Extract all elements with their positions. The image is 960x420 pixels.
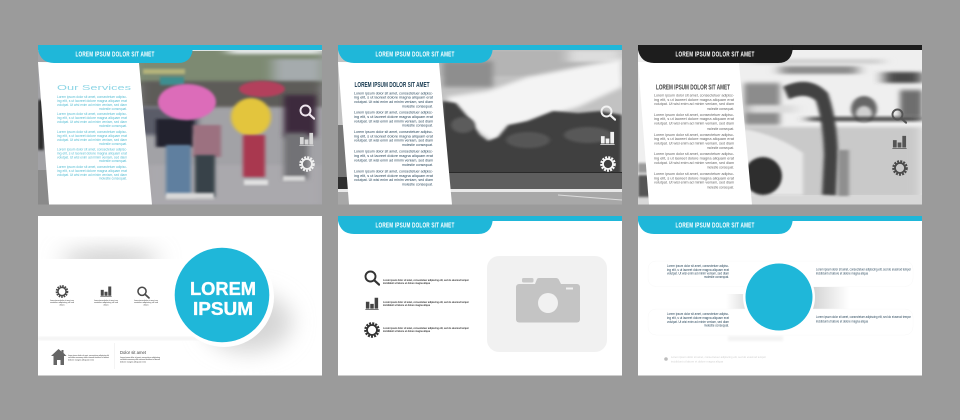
icon: gear	[300, 157, 314, 171]
body copy: ing elit, s ut laoreet dolore magna aliquam erat	[654, 117, 734, 121]
teal circle	[175, 248, 269, 342]
panel: central circle slide	[638, 216, 922, 376]
top strip	[338, 216, 622, 221]
text: magnifier row	[383, 278, 469, 285]
header tab	[638, 216, 793, 234]
text: lower left: Lorem ipsum dolor sit amet, consectetuer adipisc-	[667, 312, 730, 316]
body copy: ing elit, s ut laoreet dolore magna aliquam erat	[354, 134, 434, 138]
icon: gear	[57, 286, 67, 297]
body copy: Lorem ipsum dolor sit amet, consectetuer adipisc-	[654, 172, 735, 176]
slide background	[338, 216, 622, 376]
address text	[68, 354, 109, 361]
text: upper left	[667, 264, 730, 279]
address text: dolore magna aliquam erat	[68, 358, 94, 361]
caption: bars: sectetuer adipiscing elit sed	[94, 301, 118, 304]
body copy: volutpat. Ut wisi enim ad minim veniam, sed diam	[57, 120, 127, 124]
caption: magnifier	[134, 299, 158, 306]
icon: gear	[893, 161, 907, 175]
body copy: molestie consequat.	[99, 159, 127, 163]
caption: gear: sectetuer adipiscing elit sed	[50, 301, 74, 304]
caption: gear: Lorem ipsum dolor sit amet, con	[50, 299, 74, 302]
body copy	[654, 94, 735, 189]
tab title: LOREM IPSUM DOLOR SIT AMET	[676, 222, 755, 229]
body copy: ing elit, s ut laoreet dolore magna aliquam erat	[57, 169, 127, 173]
text: upper right: Lorem ipsum dolor sit amet, consectetuer adipiscing elit, sed do eiusmod tempor	[816, 267, 912, 271]
body copy: Lorem ipsum dolor sit amet, consectetuer adipisc-	[654, 152, 735, 156]
body copy: ing elit, s ut laoreet dolore magna aliquam erat	[354, 154, 434, 158]
circle title	[190, 279, 256, 319]
text: lower right: Lorem ipsum dolor sit amet, consectetuer adipiscing elit, sed do eiusmod tempor	[816, 315, 912, 319]
icon: bars	[299, 133, 314, 146]
text: magnifier row: Lorem ipsum dolor sit amet, consectetuer adipiscing elit, sed do eiusmod tempor	[383, 278, 469, 282]
footer bullet	[664, 357, 668, 361]
body copy: volutpat. Ut wisi enim ad minim veniam, sed diam	[57, 173, 127, 177]
text: upper right: incididunt ut labore et dolore magna aliqua	[816, 271, 869, 275]
text: upper right	[816, 267, 912, 275]
text: bars row: Lorem ipsum dolor sit amet, consectetuer adipiscing elit, sed do eiusmod tempor	[383, 300, 469, 304]
body copy: molestie consequat.	[707, 146, 734, 150]
tab title: LOREM IPSUM DOLOR SIT AMET	[376, 222, 455, 229]
contact text: Lorem ipsum dolor sit amet, consectetuer adipiscing	[120, 356, 160, 359]
contact text: Dolor sit amet	[120, 350, 147, 355]
soft shadows	[38, 251, 292, 352]
body copy: Lorem ipsum dolor sit amet, consectetuer adipisc-	[354, 91, 434, 95]
icon: magnifier	[892, 110, 906, 123]
text: gear row: Lorem ipsum dolor sit amet, consectetuer adipiscing elit, sed do eiusmod tempor	[383, 326, 469, 330]
body copy: molestie consequat.	[402, 183, 433, 187]
slide background	[38, 216, 322, 376]
body copy: Lorem ipsum dolor sit amet, consectetuer adipisc-	[57, 165, 128, 169]
body copy: molestie consequat.	[402, 143, 433, 147]
body copy	[354, 91, 434, 187]
body copy: molestie consequat.	[707, 166, 734, 170]
contact text: dolore magna aliquam erat	[120, 360, 146, 363]
body copy: ing elit, s ut laoreet dolore magna aliquam erat	[654, 137, 734, 141]
footer text: Lorem ipsum dolor sit amet, consectetuer adipiscing elit, sed do eiusmod tempor	[671, 356, 766, 359]
soft shadows	[726, 287, 849, 341]
text: lower left: molestie consequat.	[704, 324, 729, 328]
caption: bars: diam	[104, 304, 109, 306]
text: lower left: ing elit, s ut laoreet dolore magna aliquam erat	[667, 316, 730, 320]
icon: bars	[100, 286, 112, 297]
top strip	[638, 216, 922, 221]
footer text	[671, 356, 766, 363]
body copy: molestie consequat.	[99, 177, 127, 181]
contact text	[120, 350, 160, 363]
body copy: volutpat. Ut wisi enim ad minim veniam, sed diam	[57, 103, 127, 107]
heading: LOREM IPSUM DOLOR SIT AMET	[656, 84, 730, 91]
body copy: Lorem ipsum dolor sit amet, consectetuer adipisc-	[57, 95, 128, 99]
body copy: volutpat. Ut wisi enim ad minim veniam, sed diam	[654, 102, 734, 106]
body copy: ing elit, s ut laoreet dolore magna aliquam erat	[354, 96, 434, 100]
caption: bars: Lorem ipsum dolor sit amet, con	[94, 299, 118, 302]
body copy: molestie consequat.	[707, 185, 734, 189]
text: lower left	[667, 312, 730, 328]
caption: gear: diam	[60, 304, 65, 306]
body copy: Lorem ipsum dolor sit amet, consectetuer adipisc-	[654, 133, 735, 137]
caption: magnifier: sectetuer adipiscing elit sed	[134, 301, 158, 304]
text: upper left: volutpat. Ut wisi enim ad minim veniam, sed diam	[667, 272, 729, 276]
panel: landscape slide	[338, 45, 622, 205]
photo: trees and sky	[338, 45, 622, 205]
caption: gear	[50, 299, 74, 306]
body copy: Lorem ipsum dolor sit amet, consectetuer adipisc-	[57, 148, 128, 152]
top strip	[638, 45, 922, 50]
panel: our services slide	[38, 45, 323, 205]
text: lower right: incididunt ut labore et dolore magna aliqua	[816, 319, 869, 323]
body copy: Lorem ipsum dolor sit amet, consectetuer adipisc-	[354, 150, 434, 154]
slide background	[638, 216, 922, 376]
circle title: LOREM	[190, 279, 256, 299]
body copy: volutpat. Ut wisi enim ad minim veniam, sed diam	[354, 139, 433, 143]
header tab	[38, 45, 193, 63]
address text: sed diam nonummy nibh euismod tincidunt ut laoreet	[68, 356, 109, 359]
image placeholder	[487, 256, 607, 352]
body copy: ing elit, s ut laoreet dolore magna aliquam erat	[354, 115, 434, 119]
white circle ring	[174, 247, 274, 347]
white text sheet	[338, 62, 452, 204]
panel: camera slide	[338, 216, 622, 376]
icon: bars	[892, 136, 907, 149]
icon: house	[51, 349, 66, 365]
tab title: LOREM IPSUM DOLOR SIT AMET	[76, 51, 155, 58]
white text sheet	[38, 62, 152, 204]
icon: gear	[365, 323, 379, 337]
body copy: Lorem ipsum dolor sit amet, consectetuer adipisc-	[57, 130, 128, 134]
text: upper left: ing elit, s ut laoreet dolore magna aliquam erat	[667, 268, 730, 272]
caption: magnifier: Lorem ipsum dolor sit amet, con	[134, 299, 158, 302]
text: gear row: incididunt ut labore et dolore magna aliqua	[383, 329, 430, 333]
heading: LOREM IPSUM DOLOR SIT AMET	[354, 82, 430, 89]
body copy: molestie consequat.	[99, 124, 127, 128]
circle title: IPSUM	[193, 299, 253, 319]
body copy: volutpat. Ut wisi enim ad minim veniam, sed diam	[354, 158, 433, 162]
icon: camera	[516, 278, 580, 322]
body copy: molestie consequat.	[402, 124, 433, 128]
icon: bars	[365, 298, 379, 310]
body copy: volutpat. Ut wisi enim ad minim veniam, sed diam	[354, 100, 433, 104]
body copy: molestie consequat.	[99, 142, 127, 146]
photo: person at car	[638, 45, 922, 205]
text: lower right	[816, 315, 912, 323]
body copy: ing elit, s ut laoreet dolore magna aliquam erat	[654, 98, 734, 102]
footer text: incididunt ut labore et dolore magna aliqua	[671, 360, 724, 363]
photo: people with umbrellas	[38, 45, 323, 205]
caption: bars	[94, 299, 118, 306]
text: bars row	[383, 300, 469, 307]
body copy: molestie consequat.	[707, 127, 734, 131]
tab title: LOREM IPSUM DOLOR SIT AMET	[676, 51, 755, 58]
body copy: Lorem ipsum dolor sit amet, consectetuer adipisc-	[654, 94, 735, 98]
band outlines	[648, 261, 913, 335]
text: magnifier row: incididunt ut labore et dolore magna aliqua	[383, 281, 430, 285]
body copy: volutpat. Ut wisi enim ad minim veniam, sed diam	[57, 155, 127, 159]
body copy: ing elit, s ut laoreet dolore magna aliquam erat	[654, 176, 734, 180]
panel: car slide	[638, 45, 922, 205]
panel: lorem ipsum circle slide	[38, 216, 322, 376]
icon: magnifier	[366, 272, 379, 285]
top strip	[38, 45, 322, 50]
caption: magnifier: diam	[144, 304, 149, 306]
body copy: Lorem ipsum dolor sit amet, consectetuer adipisc-	[57, 112, 128, 116]
top strip	[338, 45, 622, 50]
body copy: volutpat. Ut wisi enim ad minim veniam, sed diam	[354, 178, 433, 182]
circle ring	[743, 261, 815, 333]
body copy: molestie consequat.	[707, 107, 734, 111]
divider	[113, 343, 116, 369]
icon: magnifier	[602, 106, 615, 120]
text: upper left: Lorem ipsum dolor sit amet, consectetuer adipisc-	[667, 264, 730, 268]
body copy: Lorem ipsum dolor sit amet, consectetuer adipisc-	[354, 130, 434, 134]
heading: our services: Our Services	[57, 83, 132, 92]
header tab	[638, 45, 793, 63]
body copy: ing elit, s ut laoreet dolore magna aliquam erat	[57, 116, 127, 120]
body copy: molestie consequat.	[99, 107, 127, 111]
white text sheet	[638, 62, 752, 204]
body copy: volutpat. Ut wisi enim ad minim veniam, sed diam	[354, 119, 433, 123]
icon: magnifier	[138, 287, 149, 298]
body copy: ing elit, s ut laoreet dolore magna aliquam erat	[57, 152, 127, 156]
body copy: volutpat. Ut wisi enim ad minim veniam, sed diam	[57, 138, 127, 142]
icon: magnifier	[300, 106, 314, 119]
text: gear row	[383, 326, 469, 333]
body copy: Lorem ipsum dolor sit amet, consectetuer adipisc-	[654, 113, 735, 117]
body copy	[57, 95, 128, 181]
text: bars row: incididunt ut labore et dolore magna aliqua	[383, 303, 430, 307]
body copy: volutpat. Ut wisi enim ad minim veniam, sed diam	[654, 181, 734, 185]
body copy: volutpat. Ut wisi enim ad minim veniam, sed diam	[654, 142, 734, 146]
text: lower left: volutpat. Ut wisi enim ad minim veniam, sed diam	[667, 320, 729, 324]
header tab	[338, 216, 493, 234]
icon: gear	[601, 157, 615, 171]
body copy: molestie consequat.	[402, 163, 433, 167]
body copy: ing elit, s ut laoreet dolore magna aliquam erat	[654, 156, 734, 160]
contact text: sed diam nonummy nibh euismod tincidunt ut laoreet	[120, 358, 160, 361]
tab title: LOREM IPSUM DOLOR SIT AMET	[376, 51, 455, 58]
teal circle	[746, 264, 812, 330]
body copy: volutpat. Ut wisi enim ad minim veniam, sed diam	[654, 122, 734, 126]
body copy: Lorem ipsum dolor sit amet, consectetuer adipisc-	[354, 169, 434, 173]
body copy: volutpat. Ut wisi enim ad minim veniam, sed diam	[654, 161, 734, 165]
text: upper left: molestie consequat.	[704, 275, 729, 279]
body copy: ing elit, s ut laoreet dolore magna aliquam erat	[57, 99, 127, 103]
body copy: ing elit, s ut laoreet dolore magna aliquam erat	[57, 134, 127, 138]
icon: bars	[600, 132, 615, 145]
address text: Lorem ipsum dolor sit amet, consectetuer adipiscing elit	[68, 354, 109, 357]
body copy: ing elit, s ut laoreet dolore magna aliquam erat	[354, 174, 434, 178]
body copy: molestie consequat.	[402, 104, 433, 108]
header tab	[338, 45, 493, 63]
body copy: Lorem ipsum dolor sit amet, consectetuer adipisc-	[354, 111, 434, 115]
